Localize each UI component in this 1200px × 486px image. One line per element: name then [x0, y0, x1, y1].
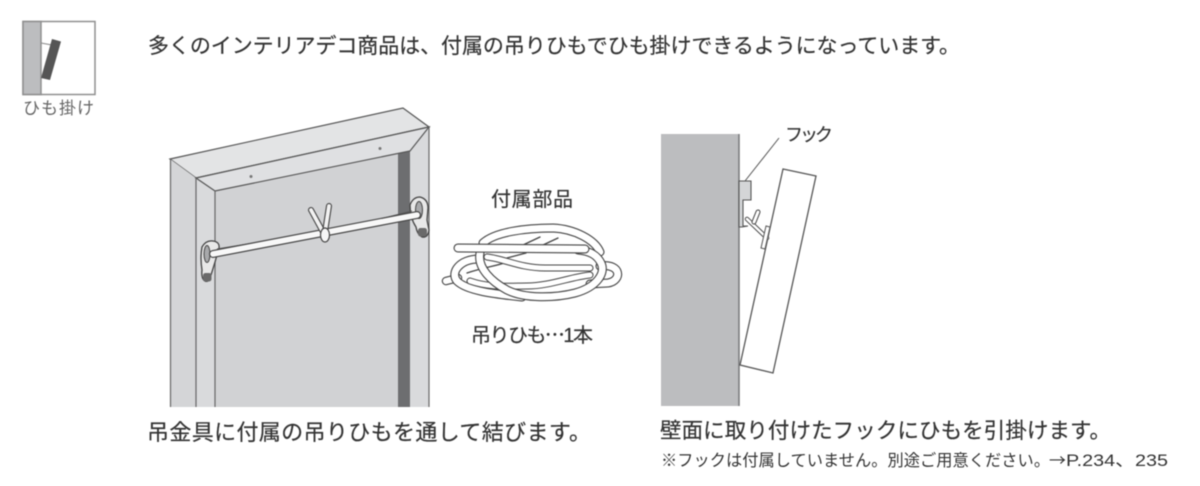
- note: ※フックは付属していません。別途ご用意ください。: [661, 452, 1050, 470]
- icon: hanging by cord: [23, 22, 95, 94]
- note: →: [1049, 447, 1066, 471]
- illustration: coiled cord: [446, 228, 618, 297]
- note: [661, 446, 1168, 471]
- frame top face: [170, 108, 429, 178]
- cord across frame: [213, 206, 417, 254]
- note: P.234 、235: [1066, 446, 1168, 471]
- label: one hanging cord: 吊りひも…1本: [471, 319, 593, 348]
- leader line: [745, 138, 779, 181]
- intro text: 多くのインテリアデコ商品は、付属の吊りひもでひも掛けできるようになっています。: [148, 35, 960, 58]
- right hanging bracket: [410, 197, 429, 237]
- frame side: [740, 169, 816, 373]
- left hanging bracket: [201, 241, 219, 282]
- wall: [661, 134, 739, 406]
- cord on bracket: [747, 212, 770, 249]
- label: included parts: 付属部品: [491, 188, 573, 211]
- caption: tie the cord: 吊金具に付属の吊りひもを通して結びます。: [147, 420, 591, 445]
- wall hook: [739, 181, 751, 227]
- illustration: side view on wall: [661, 134, 816, 406]
- icon caption: ひも掛け: [23, 99, 94, 118]
- frame body: [170, 127, 429, 407]
- illustration: frame with cord: [170, 108, 429, 407]
- caption: hook the cord: 壁面に取り付けたフックにひもを引掛けます。: [660, 419, 1111, 443]
- label: hook: フック: [785, 125, 833, 145]
